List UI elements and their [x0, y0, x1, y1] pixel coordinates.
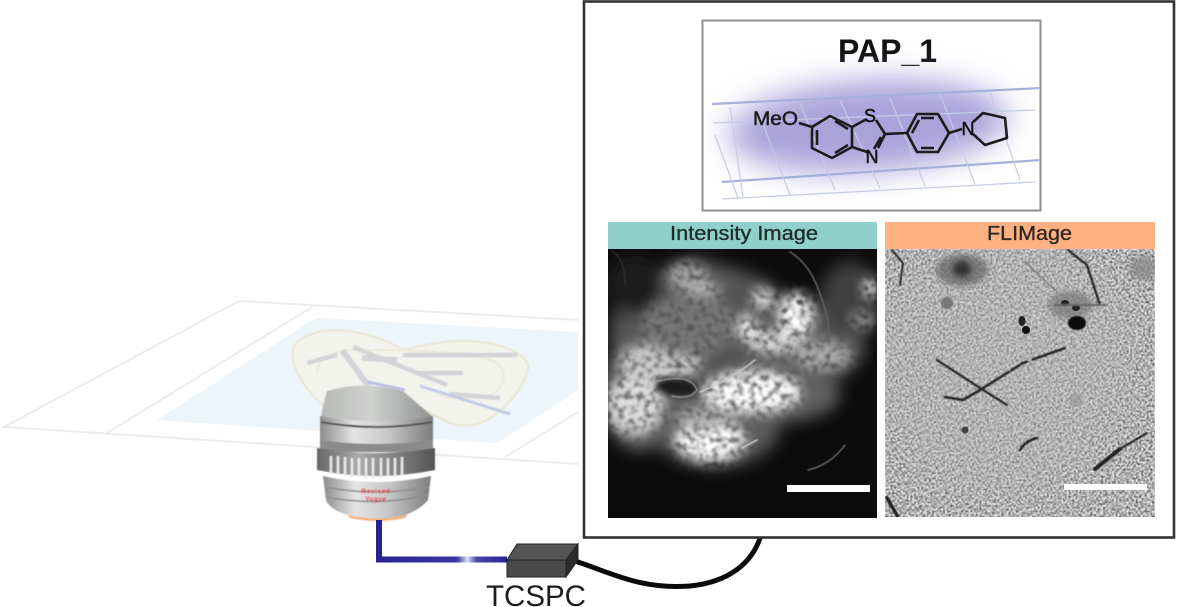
FLIM header: FLIMage — [987, 222, 1072, 245]
vessel shadow — [655, 376, 699, 398]
objective front lens — [345, 510, 410, 521]
objective lower barrel — [323, 476, 431, 518]
S atom: S — [864, 106, 876, 126]
FLIM scale bar — [1064, 484, 1147, 490]
purple glow and grid — [712, 70, 1041, 199]
intensity image panel — [602, 222, 880, 518]
microscope objective — [317, 386, 435, 521]
intensity scale bar — [787, 485, 870, 492]
results panel — [584, 2, 1174, 538]
intensity header: Intensity Image — [670, 222, 818, 245]
objective red label: Revised — [361, 488, 391, 495]
tissue section — [293, 330, 528, 426]
probe card — [702, 20, 1041, 210]
molecule structure — [753, 106, 1007, 167]
objective upper cone — [320, 386, 433, 436]
intensity micrograph — [602, 249, 880, 518]
slide outline — [4, 301, 578, 464]
pyrrolidine N atom: N — [962, 119, 974, 139]
TCSPC detector box — [507, 544, 578, 577]
objective knurled ring — [317, 448, 435, 478]
microscope slide with tissue sample — [4, 301, 578, 464]
intensity header — [608, 222, 877, 249]
MeO label: MeO — [753, 109, 798, 130]
FLIM micrograph — [885, 249, 1157, 518]
objective collar — [320, 416, 433, 446]
probe name: PAP_1 — [838, 33, 937, 69]
FLIM image panel — [885, 222, 1157, 518]
probe card frame — [702, 20, 1040, 210]
panel frame — [584, 2, 1174, 538]
tissue veins — [307, 347, 517, 414]
black cable to panel — [572, 538, 760, 587]
blue sample area — [157, 318, 578, 443]
N atom: N — [866, 147, 878, 167]
FLIM header — [885, 222, 1155, 249]
microscope objective: Vogue — [366, 497, 387, 503]
blue optical fibre — [379, 520, 507, 560]
